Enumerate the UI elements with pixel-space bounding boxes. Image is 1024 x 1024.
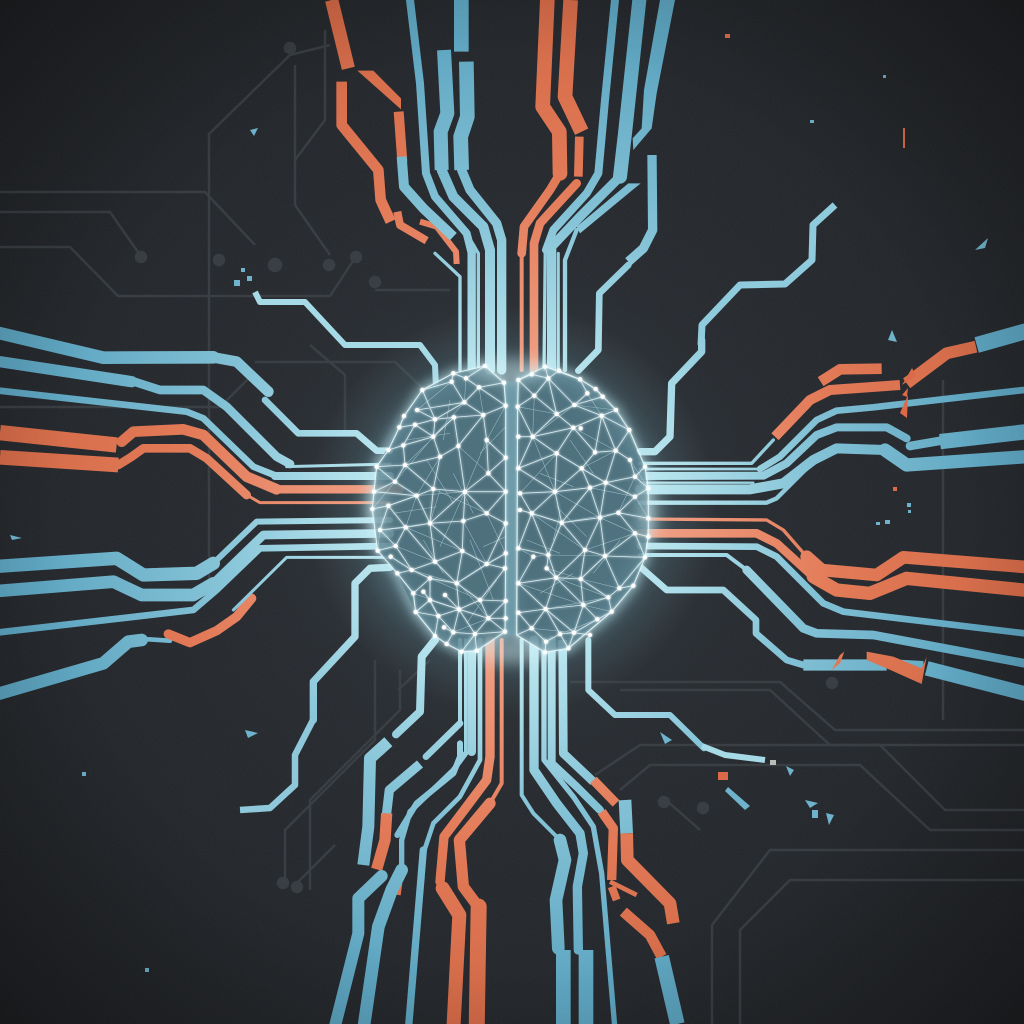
blue trace bottom 4 [534, 640, 583, 950]
blue trace bottom 3 [522, 640, 560, 840]
brain outer glow [372, 366, 648, 652]
faint circuit board lines: bottom right [570, 380, 1024, 1024]
orange broken traces top left [332, 0, 457, 264]
right hemisphere fine mesh [518, 393, 648, 634]
brain fill [372, 366, 648, 652]
brain [372, 366, 648, 652]
blue trace left 2 [0, 361, 132, 382]
blue trace bottom 7 [563, 640, 593, 782]
bright glow spots at brain poles [370, 362, 654, 660]
blue trace left 7 [0, 640, 142, 695]
blue trace right 3 [940, 432, 1024, 442]
traces: left bundle [0, 332, 400, 720]
blue trace right 4 [885, 450, 1024, 465]
blue trace from fragment [402, 157, 453, 237]
blue trace top 8 [628, 155, 653, 262]
blue trace bottom 6 [552, 640, 600, 810]
lower left arm continuation [240, 720, 313, 810]
traces: top bundle [332, 0, 675, 371]
right hemisphere mesh [517, 367, 648, 652]
orange trace right 2 [640, 533, 813, 577]
blue trace left 4 [0, 558, 213, 575]
left arm trace [255, 292, 436, 388]
orange trace left 1 [0, 433, 117, 445]
orange trace left 2 [0, 457, 118, 465]
soft halo behind brain [307, 305, 717, 715]
orange trace right 1 [640, 519, 807, 557]
orange fragments bottom right [602, 812, 613, 880]
blue trace bottom 2 [426, 723, 460, 757]
faint circuit board lines: bottom left [278, 660, 430, 892]
lower right arm continuation [702, 746, 765, 760]
orange trace bottom 2 [490, 640, 502, 803]
traces: right bundle [640, 331, 1024, 694]
blue trace top 3 [439, 0, 483, 52]
blue trace left 6 [0, 546, 390, 633]
orange fragment bottom left [377, 813, 387, 869]
blue trace right 2 [760, 390, 1024, 469]
blue trace top 4 [546, 0, 615, 250]
orange fragments right lower [867, 652, 927, 684]
blue trace top 1 [410, 0, 472, 253]
orange trace bottom 1 [440, 640, 490, 882]
blue trace top 5 [620, 0, 639, 177]
blue trace left 3 [0, 390, 277, 476]
left hemisphere mesh [372, 366, 506, 652]
upper right arm trace [701, 205, 835, 345]
orange trace top 2 [565, 0, 582, 132]
blue trace top 2 [441, 50, 447, 170]
orange fragments right [821, 369, 882, 382]
orange trace top 1 [543, 0, 560, 173]
blue trace bottom 1 [396, 640, 435, 734]
lower left arm trace [313, 567, 390, 720]
lower right arm trace [588, 640, 704, 748]
central fissure glow [506, 382, 518, 635]
blue trace right 1 [977, 331, 1024, 345]
left hemisphere nodes [372, 366, 506, 652]
blue trace right 6 [640, 555, 747, 570]
blue trace right 7 [640, 567, 803, 665]
blue trace bottom 5 [544, 640, 615, 1024]
left hemisphere fine mesh [372, 378, 506, 632]
blue trace left 5 [0, 582, 213, 595]
faint circuit board lines: top left [0, 30, 450, 580]
right arm trace [640, 340, 702, 452]
blue trace left 1 [0, 332, 213, 358]
blue thin trace left [233, 557, 390, 610]
orange fragment left [168, 598, 252, 643]
blue trace right 5 [640, 546, 1024, 634]
blue traces bottom left [454, 640, 466, 723]
blue trace top 6 [633, 0, 675, 150]
right hemisphere nodes [518, 367, 648, 652]
blue trace bottom 8 [662, 957, 677, 1024]
blue trace top 7 [577, 183, 641, 233]
traces: bottom bundle [334, 640, 704, 1024]
